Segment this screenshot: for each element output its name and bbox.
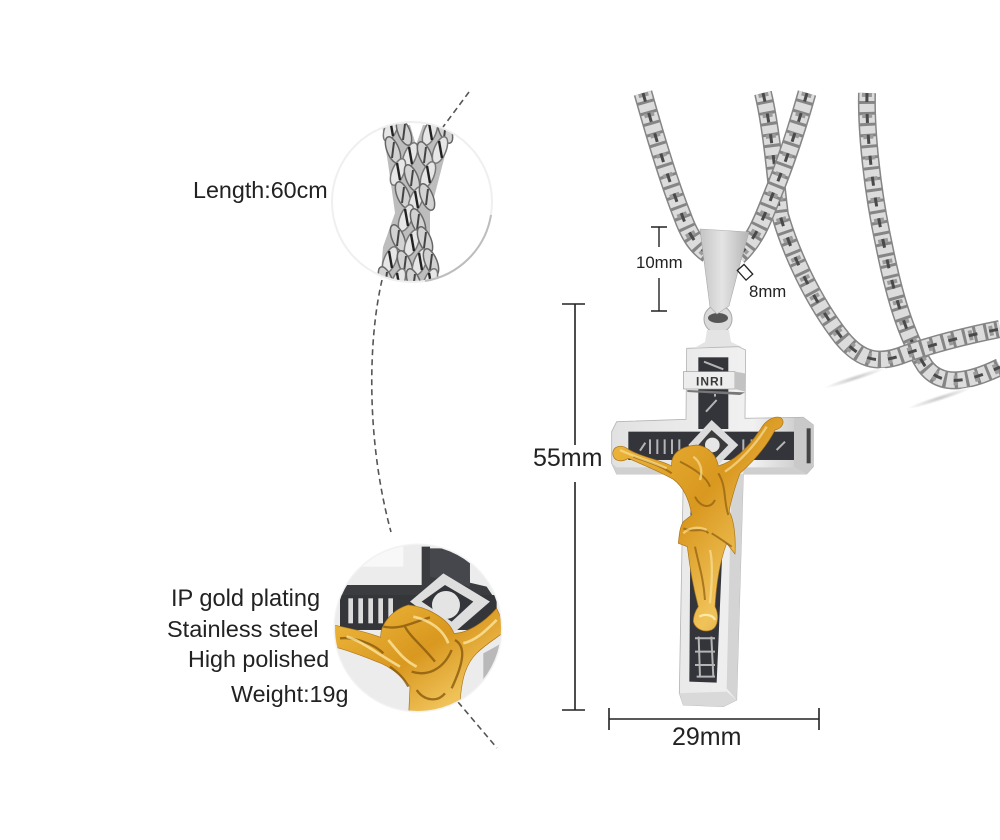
cross pendant: [612, 347, 813, 707]
chain strand front: [643, 93, 807, 256]
dashed connector line: [372, 92, 497, 748]
dimension: pendant height 55mm: [533, 304, 602, 710]
cross black inlays: [628, 357, 794, 683]
dimension: bail width 8mm: 8mm: [749, 282, 786, 301]
chain close-up braid: [378, 123, 454, 281]
dimension: bail height 10mm: 10mm: [636, 253, 683, 272]
material and weight labels: Weight:19g: [231, 681, 348, 707]
diamond medallion: [688, 420, 738, 470]
chain strand back right: [867, 93, 1000, 380]
pendant bail: [696, 229, 749, 347]
material and weight labels: Stainless steel: [167, 616, 319, 642]
dimension: pendant height 55mm: 55mm: [533, 444, 602, 472]
material and weight labels: High polished: [188, 646, 329, 672]
dimension: bail height 10mm: [636, 227, 683, 311]
material and weight labels: IP gold plating: [171, 586, 320, 612]
INRI band: [683, 372, 745, 395]
gold corpus: [613, 417, 783, 631]
close-up gold figure: [335, 604, 501, 711]
infographic canvas: [168, 90, 1000, 748]
table reflection shadows: [824, 365, 973, 411]
dimension: pendant width 29mm: [609, 708, 819, 751]
detail circle: gold figure close-up: [334, 544, 502, 712]
material and weight labels: [167, 586, 348, 707]
cross silver body: [612, 347, 813, 707]
dimension: pendant width 29mm: 29mm: [672, 723, 741, 751]
close-up engraved cross: [340, 546, 500, 680]
inlay engraved pattern: [640, 362, 785, 677]
corpus shading: [620, 427, 767, 620]
INRI band: INRI: [696, 374, 724, 388]
chain strand middle: [763, 93, 1000, 360]
necklace chain: [643, 93, 1000, 380]
label: length: Length:60cm: [193, 177, 328, 203]
detail circle: chain close-up: [331, 121, 493, 283]
dimension: bail width 8mm: [737, 264, 786, 301]
